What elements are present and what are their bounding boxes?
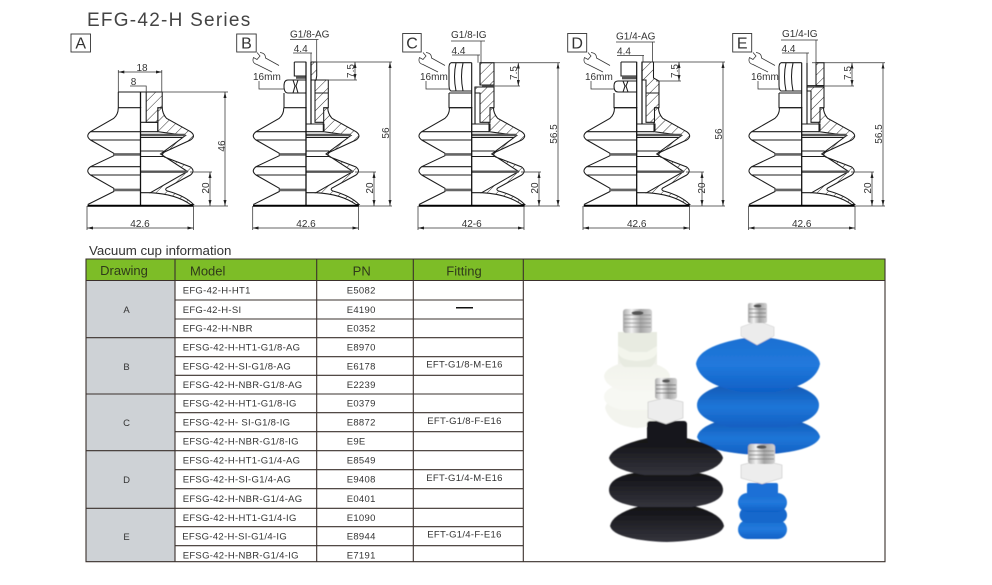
cup cross-section A bbox=[88, 92, 194, 206]
PN column: E8549 bbox=[347, 456, 376, 466]
dimensions C: 56.5 bbox=[549, 124, 560, 144]
model column bbox=[182, 286, 302, 561]
dimensions C: 7.5 bbox=[509, 66, 520, 80]
model column: EFSG-42-H- SI-G1/8-IG bbox=[183, 418, 290, 428]
dimensions D: 16mm bbox=[585, 72, 613, 83]
drawing D bbox=[568, 32, 725, 230]
dimensions B: 56 bbox=[381, 127, 392, 139]
dimensions C bbox=[418, 30, 560, 230]
dimensions B: 4.4 bbox=[294, 44, 308, 55]
label box B: B bbox=[241, 36, 252, 52]
table header row: Model bbox=[190, 264, 226, 278]
label box A: A bbox=[75, 36, 86, 52]
drawing B bbox=[237, 30, 392, 230]
wrench icon B bbox=[253, 52, 279, 72]
dimensions E bbox=[748, 29, 885, 230]
drawing E bbox=[733, 29, 885, 230]
dimensions D: 7.5 bbox=[670, 64, 681, 78]
PN column: E1090 bbox=[347, 513, 376, 524]
PN column: E4190 bbox=[347, 305, 376, 316]
label box E: E bbox=[737, 36, 748, 52]
dimensions E: 56.5 bbox=[874, 124, 885, 144]
dimensions C: 4.4 bbox=[452, 46, 466, 57]
PN column: E9408 bbox=[347, 474, 376, 486]
cup cross-section C bbox=[419, 63, 525, 206]
product photo: vacuum cups bbox=[604, 303, 820, 542]
dimensions E: 42.6 bbox=[792, 219, 812, 230]
PN column: E2239 bbox=[347, 380, 376, 391]
dimensions E: G1/4-IG bbox=[782, 29, 818, 40]
dimensions C: 16mm bbox=[420, 72, 448, 83]
model column: EFSG-42-H-NBR-G1/8-AG bbox=[183, 380, 302, 391]
dimensions B: 20 bbox=[365, 182, 376, 194]
label box B bbox=[237, 34, 256, 52]
table heading: Vacuum cup information bbox=[89, 243, 231, 258]
label box A bbox=[71, 34, 90, 52]
label box C bbox=[403, 34, 421, 52]
model column: EFSG-42-H-NBR-G1/8-IG bbox=[183, 436, 299, 448]
drawing column bbox=[86, 280, 175, 562]
large blue cup bbox=[696, 303, 820, 455]
title: EFG-42-H Series bbox=[87, 10, 251, 31]
drawing C bbox=[403, 30, 560, 230]
wrench icon C bbox=[419, 52, 445, 72]
PN column: E0401 bbox=[347, 494, 376, 505]
dimensions C: 42-6 bbox=[462, 219, 482, 230]
dimensions E: 16mm bbox=[751, 72, 779, 83]
dimensions A: 46 bbox=[217, 140, 228, 152]
white cup bbox=[604, 309, 670, 428]
cup cross-section E bbox=[749, 63, 855, 206]
dimensions B: 16mm bbox=[253, 72, 281, 83]
fitting column bbox=[426, 307, 503, 540]
dimensions A: 18 bbox=[136, 63, 148, 74]
PN column bbox=[347, 286, 376, 561]
PN column: E8970 bbox=[347, 342, 376, 354]
PN column: E0379 bbox=[347, 399, 376, 410]
fitting column: EFT-G1/4-M-E16 bbox=[426, 473, 503, 484]
dimensions C: 20 bbox=[530, 182, 541, 194]
dimensions D: 20 bbox=[697, 182, 708, 194]
dimensions C: G1/8-IG bbox=[451, 30, 487, 41]
PN column: E9E bbox=[347, 436, 366, 448]
dimensions E: 7.5 bbox=[843, 66, 854, 80]
dimensions B: 42.6 bbox=[296, 219, 316, 230]
fitting column: EFT-G1/8-M-E16 bbox=[426, 360, 503, 370]
dimensions D: 4.4 bbox=[617, 46, 631, 58]
model column: EFSG-42-H-HT1-G1/4-AG bbox=[183, 456, 300, 466]
model column: EFSG-42-H-SI-G1/4-IG bbox=[182, 532, 287, 542]
drawing column: A bbox=[123, 305, 130, 316]
PN column: E6178 bbox=[347, 361, 376, 372]
label box D: D bbox=[571, 36, 583, 52]
dimensions D: G1/4-AG bbox=[616, 32, 656, 42]
label box E bbox=[733, 34, 752, 52]
cup cross-section D bbox=[584, 62, 690, 206]
black cup bbox=[609, 378, 724, 542]
model column: EFSG-42-H-HT1-G1/8-IG bbox=[183, 399, 297, 410]
label box C: C bbox=[406, 36, 418, 52]
PN column: E5082 bbox=[347, 286, 376, 296]
cup cross-section B bbox=[253, 62, 359, 206]
model column: EFSG-42-H-NBR-G1/4-AG bbox=[183, 494, 302, 505]
drawing column: C bbox=[123, 418, 130, 429]
small blue cup bbox=[738, 444, 787, 539]
PN column: E0352 bbox=[347, 324, 376, 335]
PN column: E7191 bbox=[347, 550, 376, 561]
table header row bbox=[86, 259, 885, 280]
model column: EFG-42-H-NBR bbox=[183, 324, 253, 335]
table header row: Drawing bbox=[100, 263, 148, 278]
dimensions A: 42.6 bbox=[130, 219, 150, 230]
label box D bbox=[568, 34, 587, 52]
fitting column: EFT-G1/8-F-E16 bbox=[427, 416, 502, 427]
model column: EFSG-42-H-HT1-G1/8-AG bbox=[183, 342, 300, 354]
dimensions B: 7.5 bbox=[346, 64, 357, 78]
dimensions B bbox=[253, 30, 392, 230]
model column: EFSG-42-H-SI-G1/8-AG bbox=[183, 361, 291, 372]
dimensions E: 20 bbox=[863, 182, 874, 194]
model column: EFSG-42-H-SI-G1/4-AG bbox=[183, 474, 291, 486]
drawing column: E bbox=[123, 532, 130, 543]
model column: EFG-42-H-HT1 bbox=[183, 286, 251, 296]
dimensions A: 20 bbox=[201, 182, 212, 194]
wrench icon E bbox=[749, 52, 775, 72]
table: vacuum cup information bbox=[86, 259, 885, 562]
dimensions D: 42.6 bbox=[627, 219, 647, 230]
drawing column: B bbox=[123, 362, 130, 373]
model column: EFSG-42-H-NBR-G1/4-IG bbox=[183, 550, 299, 561]
dimensions D: 56 bbox=[714, 128, 725, 140]
dimensions A: 8 bbox=[131, 77, 137, 88]
PN column: E8872 bbox=[347, 418, 376, 428]
drawing column: D bbox=[123, 475, 130, 486]
dimensions B: G1/8-AG bbox=[290, 30, 330, 40]
table header row: PN bbox=[353, 264, 371, 278]
dimensions D bbox=[583, 32, 725, 230]
dimensions A bbox=[87, 63, 228, 230]
fitting column: EFT-G1/4-F-E16 bbox=[427, 530, 502, 540]
dimensions E: 4.4 bbox=[782, 44, 796, 55]
table header row: Fitting bbox=[446, 264, 482, 278]
PN column: E8944 bbox=[347, 532, 376, 542]
model column: EFSG-42-H-HT1-G1/4-IG bbox=[183, 513, 297, 524]
model column: EFG-42-H-SI bbox=[183, 305, 241, 316]
wrench icon D bbox=[584, 52, 610, 72]
drawing A bbox=[71, 34, 228, 230]
